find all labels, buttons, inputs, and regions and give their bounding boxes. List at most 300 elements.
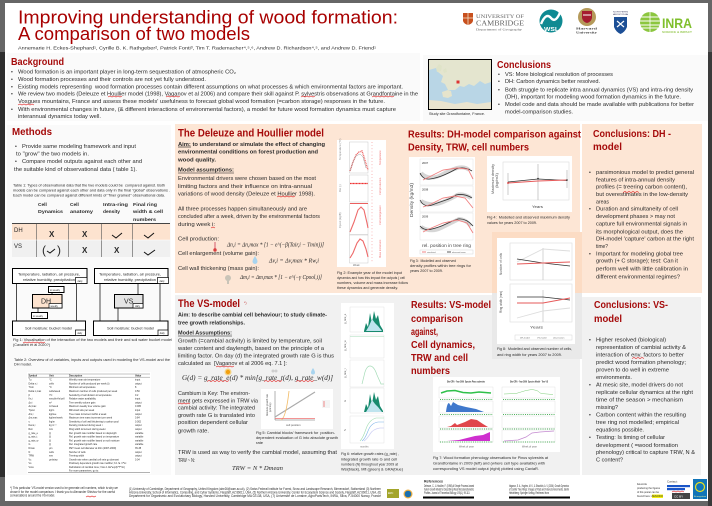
heading: methods: Methods xyxy=(12,126,52,138)
chart: fig 2 model dynamics: Week xyxy=(353,263,360,267)
data note: found here: ZENODO xyxy=(637,494,663,498)
box: DH model: to weekly xyxy=(50,289,61,292)
icon: water drop xyxy=(252,256,258,264)
model assumptions: All three processes happen simultaneously and are xyxy=(178,207,307,213)
VS aim: Aim: to describe cambial cell behaviour; to study climate- xyxy=(178,313,327,319)
table 2: β xyxy=(28,394,30,397)
conclusions VS bullets: • xyxy=(589,413,591,419)
table 2: Ring width increment during week i xyxy=(69,428,107,431)
chart: fig 7 wood formation phenology: Site GRA - Year 2009 Species Pinus sylvestris xyxy=(447,380,485,384)
table 1: Intra-ring xyxy=(103,202,128,208)
table 2: [-] xyxy=(49,439,51,442)
table 2: Tree weekly volume gain xyxy=(69,401,96,404)
fig 6 caption xyxy=(341,452,403,472)
heading: background: Background xyxy=(11,57,64,68)
fig 3 caption: years 2007 to 2009. xyxy=(410,269,443,273)
cambium text: cambial activity: The integrated xyxy=(178,405,255,411)
chart: fig 2 model dynamics: Temperature xyxy=(378,150,382,165)
fig 4 caption: values for years 2007 to 2009. xyxy=(487,221,537,225)
cambium text xyxy=(178,391,258,434)
references: Heidelberg: Springer-Verlag. Retrieved from xyxy=(509,491,549,495)
conclusions DH bullets: Duration and simultaneity of cell xyxy=(596,207,678,213)
table 2: N xyxy=(28,451,30,454)
table 2: cells/week xyxy=(49,390,61,393)
table 1 xyxy=(12,202,170,257)
logos xyxy=(463,8,692,34)
table 2: Number of cells xyxy=(69,451,86,454)
fig 8 caption: Fig 8: Modelled and observed number of cells, xyxy=(497,347,572,351)
table 2: Δv,i xyxy=(28,401,33,404)
conclusions VS bullets: C content? xyxy=(596,458,623,464)
chart: fig 6 growth rates: g_rate_w xyxy=(343,340,347,351)
box: VS soil moisture: Soil moisture: bucket model xyxy=(107,326,154,330)
table 2: output xyxy=(135,413,142,416)
fig 2 caption: Fig 2: Example year of the model input xyxy=(337,271,402,275)
logo: WSL: WSL xyxy=(544,27,560,33)
icon: tree xyxy=(225,275,231,284)
model assumptions: concluded after a week, driven by the environmental factors xyxy=(178,214,320,220)
methods bullets: • xyxy=(15,144,17,150)
table 2: mm xyxy=(49,455,53,458)
table 2 caption xyxy=(14,358,170,366)
fig 8 caption xyxy=(497,347,572,357)
table 2: Vc xyxy=(28,458,32,461)
table 2: kg/tree/week xyxy=(49,417,63,420)
conclusions VS bullets: predict wood formation phenology; xyxy=(596,360,686,366)
conclusions VS bullets: replicate cellular dynamics at the right xyxy=(596,390,694,396)
references: References xyxy=(424,480,443,484)
icon: tree small xyxy=(272,370,278,372)
table 2: °C xyxy=(49,378,52,382)
table 2: Delta n,i xyxy=(28,382,38,385)
conclusions VS bullets: representation of cambial activity & xyxy=(596,345,687,351)
methods bullets: Compare model outputs against each other and xyxy=(22,159,142,165)
panel: Deleuze and Houllier model xyxy=(175,124,580,293)
box: VS climate input xyxy=(94,268,168,284)
logo: INRA: INRA xyxy=(662,15,692,31)
conclusions DH bullets: different environmental regimes? xyxy=(596,274,680,280)
box: DH model: to weekly xyxy=(33,315,44,318)
box: DH climate input xyxy=(12,268,87,284)
heading: conclusions VS: Conclusions: VS- xyxy=(594,299,668,311)
VS aim: tree growth relationships. xyxy=(178,321,246,327)
table 2 caption: DH model. xyxy=(14,362,32,366)
table 2: Tpost xyxy=(28,409,35,412)
conclusions VS bullets: tree ring not modelled; empirical xyxy=(596,420,679,426)
fig 4 caption: Fig 4: Modelled and observed maximum density xyxy=(487,216,570,220)
table 2: output xyxy=(135,424,142,427)
table 2: mm xyxy=(49,428,53,431)
table 2: Rel. growth rate modifier based on daylength xyxy=(69,432,117,435)
table 2: [-] xyxy=(49,432,51,435)
equations: cell processes: Δn,i = Δn,max * [1 − e^(−β(Tair,i − Tmin))] xyxy=(226,242,325,249)
fig 7 caption: corresponding VS model output (right) plotted using CaviaR. xyxy=(433,467,539,471)
fig 7 caption: Grandfontaine in 2009 (left) and (where cell type available) with xyxy=(433,462,545,466)
chart: fig 2 model dynamics: Rw (-) xyxy=(338,184,342,192)
table 2: γ xyxy=(28,420,30,423)
model assumptions: variations of wood density (Deleuze et Houllier 1998). xyxy=(178,192,315,198)
heading: conclusions DH: Conclusions: DH - xyxy=(593,128,671,140)
table 2: g_rate_e xyxy=(28,432,39,435)
heading: conclusions: Conclusions xyxy=(497,60,551,71)
VS aim xyxy=(178,313,327,327)
logo: square blue badge: Ecosystem xyxy=(694,495,706,498)
conclusions VS bullets: missing? xyxy=(596,405,618,411)
background bullets xyxy=(11,70,418,120)
table 1: Dynamics xyxy=(38,209,63,215)
methods bullets: • xyxy=(15,159,17,165)
table 2: variable xyxy=(135,439,144,442)
table 1: Cell xyxy=(38,202,47,208)
equations: cell processes: Cell production: xyxy=(178,237,219,243)
table 2: 0.84 xyxy=(135,417,140,420)
heading: results VS-model: comparison xyxy=(411,313,463,325)
conclusions bullets: • xyxy=(498,102,500,108)
chart: fig 2 model dynamics: Cpool (kg/B) xyxy=(338,212,342,228)
logo: square blue badge xyxy=(693,479,707,499)
conclusions VS bullets: Testing: Is timing of cellular xyxy=(596,435,665,441)
affiliations: (1) University of Cambridge, Department of Geography, United Kingdom (ahe26@cam.ac.uk), (2) Swiss Federal Institute for Forest, Snow and Landscape Research, Birmensdorf, Switzerland (3) Northern xyxy=(129,487,381,491)
authors: Annemarie H. Eckes-Shephard¹, Cyrille B. K. Rathgeber², Patrick Fonti³, Tim T. Rademacher⁴,⁵,⁶, Andrew D. Richardson⁴,⁵, and Andrew D. Friend¹ xyxy=(18,46,377,50)
table 2: Mill wood size per week xyxy=(69,409,95,412)
chart: fig 3 density profiles xyxy=(409,157,475,257)
fig 6 caption: numbers (N) throughout year 2009 at xyxy=(341,462,398,466)
table 1 caption: models can be compared against each other and data only in the final "global" observations . xyxy=(13,189,170,193)
background bullets: • xyxy=(11,107,13,113)
fig 6 caption: integrated growth rate G and cell xyxy=(341,458,397,462)
table 2: Sensitivity of cell wall thickening to carbon pool xyxy=(69,420,119,423)
box: VS model: VS xyxy=(124,298,134,306)
VS assumptions: limiting factor. On day (d) the integrated growth rate G is thus xyxy=(178,354,334,360)
contact: Contact : xyxy=(667,480,678,484)
chart: fig 8 cell numbers and ring width xyxy=(492,232,582,359)
contact xyxy=(667,480,690,499)
logo: University of Cambridge: CAMBRIDGE xyxy=(476,18,525,28)
chart: fig 2 model dynamics: Cell production xyxy=(378,177,382,195)
equations: cell processes: Cell enlargement (volume gain): xyxy=(178,251,259,257)
icon: sun xyxy=(224,368,232,376)
heading: results VS-model xyxy=(411,299,491,377)
box: VS soil moisture xyxy=(94,321,168,336)
chart: fig 5 cambial blocks: cell position xyxy=(286,423,301,427)
model assumptions: during week i: xyxy=(178,222,215,228)
table 2: g_rate_t xyxy=(28,436,38,439)
chart: fig 7 wood formation phenology: Site GRA - Year 2009 Species Model - Tree VS xyxy=(510,380,548,384)
table 1: DH xyxy=(14,228,23,234)
table 2: Treering width xyxy=(69,455,85,458)
equations: cell processes: Δv,i = Δv,max * Rw,i xyxy=(268,259,319,265)
table 2: /°C xyxy=(49,394,53,397)
table 2: Rel. growth rate modifier based on temperature xyxy=(69,436,120,439)
box: VS soil moisture: daily xyxy=(160,332,166,335)
equations: cell processes xyxy=(178,237,325,281)
methods bullets xyxy=(14,144,142,173)
fig 8 caption: and ring width for years 2007 to 2009. xyxy=(497,353,562,357)
heading: results VS-model: TRW and cell xyxy=(411,352,468,364)
references: Xylem Growth Model for Describing Wood Microdensitometric xyxy=(424,488,474,492)
logo: University of Cambridge: UNIVERSITY OF xyxy=(476,14,524,20)
map: study site xyxy=(428,60,492,110)
fig 3 caption: density profiles within tree rings for xyxy=(410,264,472,268)
logo: University of Cambridge xyxy=(463,13,525,32)
panel: methods xyxy=(7,125,172,475)
table 2: kg/m xyxy=(49,409,54,412)
conclusions VS bullets: • xyxy=(589,338,591,344)
chart: fig 7 wood formation phenology: Week of year xyxy=(522,446,537,448)
table 2: mmol/m²/s/cell xyxy=(49,398,65,401)
conclusions DH bullets: but overestimates in the low-density xyxy=(596,192,688,198)
table 2: output xyxy=(135,455,142,458)
chart: fig 5 cambial blocks: (µm/day) xyxy=(269,402,272,412)
references: Deleuze, C., & Houllier, F. (1998) A Simple Process-based xyxy=(424,484,474,488)
box: VS climate input: Temperature, radiation, air pressure, xyxy=(99,272,161,276)
table 2: Delimitation of cambial zone; Vcss 1 1E*exp(b*T*Vo) xyxy=(69,466,125,469)
conclusions bullets: (DH), important for modeling wood formation dynamics in the future. xyxy=(505,94,681,100)
logo: Northern Arizona shield: NORTHERN xyxy=(613,12,629,14)
heading: Deleuze and Houllier: The Deleuze and Houllier model xyxy=(178,128,324,140)
box: DH soil moisture: Soil moisture: bucket model xyxy=(25,326,72,330)
logo: Harvard University: University xyxy=(576,30,598,34)
conclusions DH bullets: • xyxy=(589,170,591,176)
chart: fig 3 density profiles: observed mean xyxy=(452,252,466,254)
affiliations: Department for Organismic and Evolutionary Biology, Harvard University, Cambridge MA 02138, USA, (7) Université de Lorraine, AgroParisTech, INRA, Silva, F-54000 Nancy, France xyxy=(129,494,381,498)
box: DH climate input: relative humidity, precipitation xyxy=(23,278,75,282)
fig 5 caption xyxy=(256,431,338,445)
table 2: Tmin xyxy=(28,386,34,389)
conclusions VS bullets: • xyxy=(589,383,591,389)
table 2: 8 xyxy=(135,386,137,389)
chart: fig 6 growth rates: months xyxy=(360,444,369,448)
heading: VS-model: *) xyxy=(244,301,247,305)
fig 1 caption: (Cavalleri et al 2020?) xyxy=(13,343,50,347)
map caption: Study site Grandfontaine, France. xyxy=(429,112,485,116)
table 2: /kg/m xyxy=(49,420,55,423)
box: VS model: daily xyxy=(135,305,141,308)
fig 2 caption xyxy=(337,271,409,290)
conclusions DH bullets: Important for modeling global tree xyxy=(596,251,683,257)
VS assumptions: water content and daylength, based on the principle of a xyxy=(178,346,324,352)
heading: results VS-model: numbers xyxy=(411,365,450,377)
VS assumptions: Growth (=cambial activity) is limited by temperature, soil xyxy=(178,338,322,344)
chart: fig 8 cell numbers and ring width: observation xyxy=(553,336,565,340)
logo: INRA xyxy=(640,12,692,34)
box: DH climate input: Temperature, radiation, air pressure, xyxy=(18,272,80,276)
conclusions DH bullets: DH-model 'capture' carbon at the right xyxy=(596,236,695,242)
conclusions VS bullets: At mesic site, model drivers do not xyxy=(596,383,684,389)
equation: growth rate: G(d) = g_rate_e(d) * min[g_rate_t(d), g_rate_w(d)] xyxy=(182,375,333,382)
chart: fig 8 cell numbers and ring width: Number of cells xyxy=(499,253,503,275)
cambium text: position dependent cellular xyxy=(178,420,248,426)
table 2: G xyxy=(28,443,30,446)
chart: fig 2 model dynamics: Cell enlargement xyxy=(378,205,382,225)
table 2: cells xyxy=(49,451,55,454)
table 2: input xyxy=(135,378,141,382)
background bullets: Wood formation is an important player in long-term sequestration of atmospheric CO₂ xyxy=(18,70,236,76)
methods bullets: the suitable kind of observational data ( table 1). xyxy=(14,167,137,173)
table 2: TRW xyxy=(28,455,35,458)
conclusions DH bullets: perform well with little calibration in xyxy=(596,266,688,272)
table 2: Number of cells produced per week (i) xyxy=(69,382,110,385)
references: Profiles. Journal of Theoretical Biology, 193(1), 99-113. xyxy=(424,491,470,495)
table 1 caption: Each model can be compared against different kinds of "finer grained" observational data. xyxy=(13,194,165,198)
VS assumptions xyxy=(178,331,334,367)
heading: results VS-model: Results: VS-model xyxy=(411,299,491,311)
aim: Aim: to understand or simulate the effect of changing xyxy=(178,142,325,148)
logo: Harvard University xyxy=(576,8,598,34)
conclusions bullets: • xyxy=(498,88,500,94)
table 2: µm xyxy=(49,447,52,450)
fig 5 caption: rate xyxy=(256,441,263,445)
table 1: density xyxy=(103,209,120,215)
fig 2 caption: numbers, volume and mass increase follow xyxy=(337,281,409,285)
box: DH model: weekly xyxy=(50,305,59,308)
cambium text: ment gets expressed in TRW via xyxy=(178,398,258,404)
logo: INRA: SCIENCE & IMPACT xyxy=(662,30,692,34)
TRW text: TRW = N * Dmean xyxy=(232,466,283,472)
fig 3 caption: Fig 3: Modelled and observed xyxy=(410,259,456,263)
model assumptions: limiting factors and their influence on intra-annual xyxy=(178,184,312,190)
references xyxy=(423,480,570,498)
table 2: cells xyxy=(49,382,55,385)
fig 1 caption: Fig 1: Visualisation of the interaction of the two models and their and soil water bucket model xyxy=(13,338,172,342)
table 2: Maximum number of cells produced per week xyxy=(69,390,118,393)
conclusions DH bullets xyxy=(589,170,695,280)
cambium text: growth rate G is translated into xyxy=(178,413,255,419)
panel: conclusions VS-model xyxy=(582,297,701,475)
affiliations: Arizona University, School of Informatics, Computing, and Cyber Systems, Flagstaff, AZ 86011, USA, (5) Northern Arizona University, Center for Ecosystem Science and Society, Flagstaff, AZ 86011, USA, (6) xyxy=(129,490,381,494)
background bullets: • xyxy=(11,70,13,76)
background bullets: With environmental changes in future, (& different interactions of environmental factors), a model for future wood formation dynamics must capture xyxy=(18,107,396,113)
table 2: Δm,i xyxy=(28,413,34,416)
chart: fig 2 model dynamics xyxy=(337,138,386,267)
table 2: kg m⁻³ xyxy=(49,424,56,427)
table 2: Minimum air temperature xyxy=(69,386,96,389)
table 2: [-] xyxy=(49,436,51,439)
chart: fig 8 cell numbers and ring width: Years xyxy=(530,324,543,330)
fig 3 caption xyxy=(410,259,472,273)
model assumptions xyxy=(178,168,320,228)
background bullets: • xyxy=(11,92,13,98)
background bullets: • xyxy=(11,77,13,83)
logo: Northern Arizona shield xyxy=(613,12,629,34)
table 2: input xyxy=(135,409,141,412)
chart: fig 3 density profiles: Density (kg/m3) xyxy=(409,182,414,217)
table 1: ) xyxy=(57,243,61,257)
table 2: 0.005 xyxy=(135,405,142,408)
panel: background xyxy=(7,53,420,121)
table 2 xyxy=(27,372,151,474)
table 2: g_rate_w xyxy=(28,439,39,442)
chart: fig 4 maximum density xyxy=(487,156,572,212)
fig 1 caption xyxy=(13,338,172,347)
table 2: 0.50 xyxy=(135,390,140,393)
references: Vaganov, E. A., Hughes, M. K., & Shashkin, A. V. (2006). Growth Dynamics xyxy=(509,484,569,488)
table 2: [-] xyxy=(49,443,51,446)
table 1 caption xyxy=(13,184,170,198)
table 2: Rwi xyxy=(28,428,33,431)
table 2: 35-38 xyxy=(135,447,142,450)
table 2: variable xyxy=(135,443,144,446)
cambium text: growth rate. xyxy=(178,428,209,434)
conclusions DH bullets: features of intra-annual density xyxy=(596,177,675,183)
logo: funder badge: ERC xyxy=(388,492,393,495)
table 2: Vo xyxy=(28,462,32,465)
chart: fig 4 maximum density: Maximum density xyxy=(491,164,495,194)
table 1: X xyxy=(114,246,120,255)
table 2: Value xyxy=(135,374,142,378)
table 1: ( xyxy=(42,243,46,257)
fig 6 caption: Wsl(black), Mfl (green) & GRA(blue) xyxy=(341,468,403,472)
background bullets: Existing models representing wood formation processes contain different assumptions on what processes & which environmental factors are important. xyxy=(18,84,403,90)
TRW text: TRW is used as way to verify the cambial model, assuming that xyxy=(178,450,338,456)
chart: fig 6 growth rates xyxy=(341,303,394,449)
conclusions DH bullets: its morphological output, does the xyxy=(596,229,683,235)
conclusions VS bullets: proven to do well in extreme xyxy=(596,368,669,374)
aim: environmental conditions on forest production and xyxy=(178,150,318,156)
methods bullets: Provide same modeling framework and input xyxy=(22,144,137,150)
title: A comparison of two models xyxy=(18,23,250,44)
conclusions VS bullets: development ( =wood formation xyxy=(596,443,678,449)
chart: fig 6 growth rates: G xyxy=(343,400,347,402)
table 2: Relative water availability xyxy=(69,398,97,401)
heading: conclusions VS: model xyxy=(594,313,622,325)
table 2: Density produced during week i xyxy=(69,424,103,427)
table 2: Dens,i xyxy=(28,424,36,427)
heading: conclusions VS xyxy=(594,299,668,325)
conclusions VS bullets xyxy=(589,338,696,464)
chart: fig 2 model dynamics: Mass increment xyxy=(378,239,382,258)
footnote xyxy=(10,486,118,498)
table 1: anatomy xyxy=(70,209,93,215)
chart: fig 8 cell numbers and ring width: DH-model xyxy=(520,338,530,340)
table 1: Cell xyxy=(70,202,79,208)
table 2: PET mean cell diameter at 20m (2007-2009) xyxy=(69,447,116,450)
table 1 caption: Table 1: Types of observational data that the two models could be compared against. Both xyxy=(13,184,165,188)
data note xyxy=(637,482,663,498)
table 2: Growth rate when cambial cell sets go dormant xyxy=(69,458,119,461)
conclusions bullets: • xyxy=(498,72,500,78)
heading: conclusions DH: model xyxy=(593,141,622,153)
chart: fig 3 density profiles: rel. position in tree ring xyxy=(422,243,472,248)
heading: results DH-model: Results: DH-model comparison against xyxy=(408,128,581,140)
logo: Northern Arizona shield: ARIZONA xyxy=(613,13,629,16)
model assumptions: Model assumptions: xyxy=(178,168,234,174)
table 2: Rel. integrated growth rate xyxy=(69,443,98,446)
box: VS climate input: daily xyxy=(160,280,165,283)
conclusions bullets: • xyxy=(498,79,500,85)
background bullets: We review two models (Deleuze et Houllier model (1998), Vaganov et al 2006) and compare their skill against P. sylvestris observations at Grandfontaine in the xyxy=(18,92,418,98)
table 1: numbers xyxy=(133,217,156,223)
data note: Data and code xyxy=(637,482,647,486)
title: Improving understanding of wood formation: xyxy=(18,6,398,28)
conclusions DH bullets: capture full environmental signals in xyxy=(596,221,687,227)
table 2: Tree mass increment within a week xyxy=(69,413,107,416)
conclusions bullets: model-comparison studies. xyxy=(505,110,573,116)
fig 7 caption xyxy=(433,456,548,471)
chart: fig 8 cell numbers and ring width: Ring width (mm) xyxy=(499,291,503,313)
box: VS climate input: relative humidity, precipitation xyxy=(104,278,156,282)
fig 7 caption: Fig 7: Wood formation phenology observations for Pinus sylvestris at xyxy=(433,456,548,460)
model assumptions: Environmental drivers were chosen based on the most xyxy=(178,176,317,182)
table 2: Sensitivity of cell division to temperature xyxy=(69,394,112,397)
title xyxy=(18,6,398,44)
contact: CC BY xyxy=(674,494,683,498)
conclusions bullets: Model code and data should be made available with publications for better xyxy=(505,102,694,108)
table 2: 0.04 xyxy=(135,458,140,461)
panel: conclusions DH-model xyxy=(582,124,702,293)
table 2 caption: Table 2: Overview of of variables, inputs and outputs used in modeling the VS-model and the xyxy=(14,358,170,362)
table 2: output xyxy=(135,382,142,385)
